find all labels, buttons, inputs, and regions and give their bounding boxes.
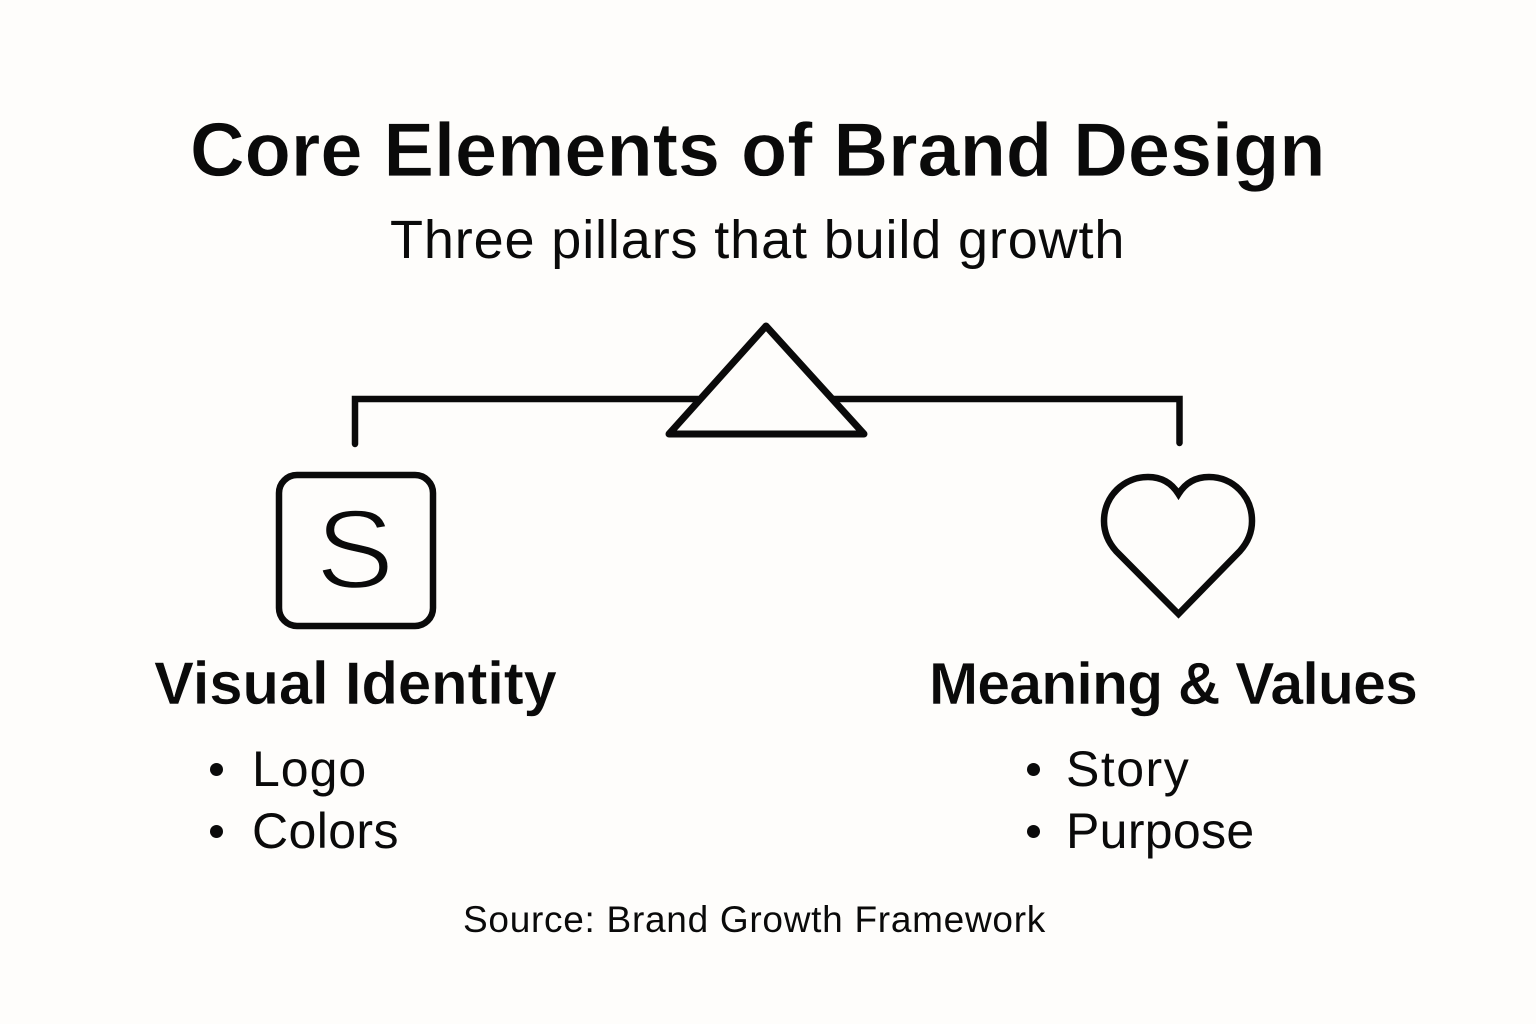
- heading: Meaning & Values: Meaning & Values: [929, 651, 1417, 717]
- item: Logo: Logo: [252, 741, 367, 797]
- icon: heart: [1104, 477, 1252, 614]
- bullet: Logo: [210, 762, 222, 776]
- item: Colors: Colors: [252, 803, 399, 859]
- icon: triangle: [669, 326, 864, 434]
- bullet: Story: [1027, 762, 1040, 776]
- connector: right arm: [834, 399, 1180, 443]
- source note: Source: Brand Growth Framework: [463, 899, 1046, 940]
- list: Meaning & Values items: [1027, 741, 1255, 859]
- list: Visual Identity items: [210, 741, 399, 859]
- icon letter: S: S: [316, 487, 394, 612]
- bullet: Colors: [210, 824, 222, 838]
- title: Core Elements of Brand Design: [190, 108, 1326, 193]
- connector: left arm: [355, 399, 698, 444]
- item: Purpose: Purpose: [1066, 803, 1255, 859]
- subtitle: Three pillars that build growth: [390, 210, 1125, 270]
- icon: rounded square logo: [279, 475, 433, 626]
- item: Story: Story: [1066, 741, 1190, 797]
- heading: Visual Identity: Visual Identity: [154, 650, 557, 717]
- bullet: Purpose: [1027, 824, 1040, 838]
